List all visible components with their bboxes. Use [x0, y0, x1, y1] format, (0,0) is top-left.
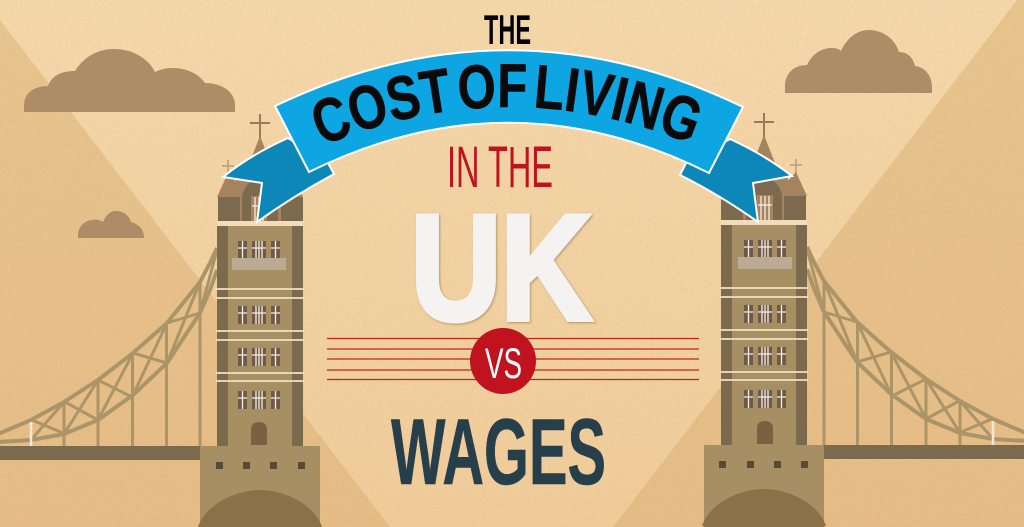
- ribbon tail: left: [223, 138, 334, 222]
- divider lines: [327, 338, 699, 380]
- tower: left: [198, 114, 322, 527]
- vs badge: [470, 328, 536, 394]
- title: IN THE: IN THE: [447, 135, 553, 200]
- ribbon tail: right: [680, 139, 792, 222]
- cloud: top right: [785, 30, 932, 93]
- title: UK: UK: [411, 184, 591, 351]
- suspension truss: left: [0, 248, 217, 446]
- cloud: large left: [24, 49, 235, 112]
- title: THE: THE: [484, 6, 531, 53]
- title: COST OF LIVING: COST OF LIVING: [313, 64, 700, 142]
- tower: right: [702, 113, 826, 527]
- ribbon: main banner: [275, 50, 743, 173]
- bridge deck: right: [823, 445, 1024, 459]
- suspension truss: right: [807, 247, 1024, 445]
- vs badge: VS: [485, 340, 522, 388]
- title: WAGES: WAGES: [391, 399, 606, 504]
- cloud: small left: [78, 211, 144, 238]
- bridge deck: left: [0, 446, 201, 460]
